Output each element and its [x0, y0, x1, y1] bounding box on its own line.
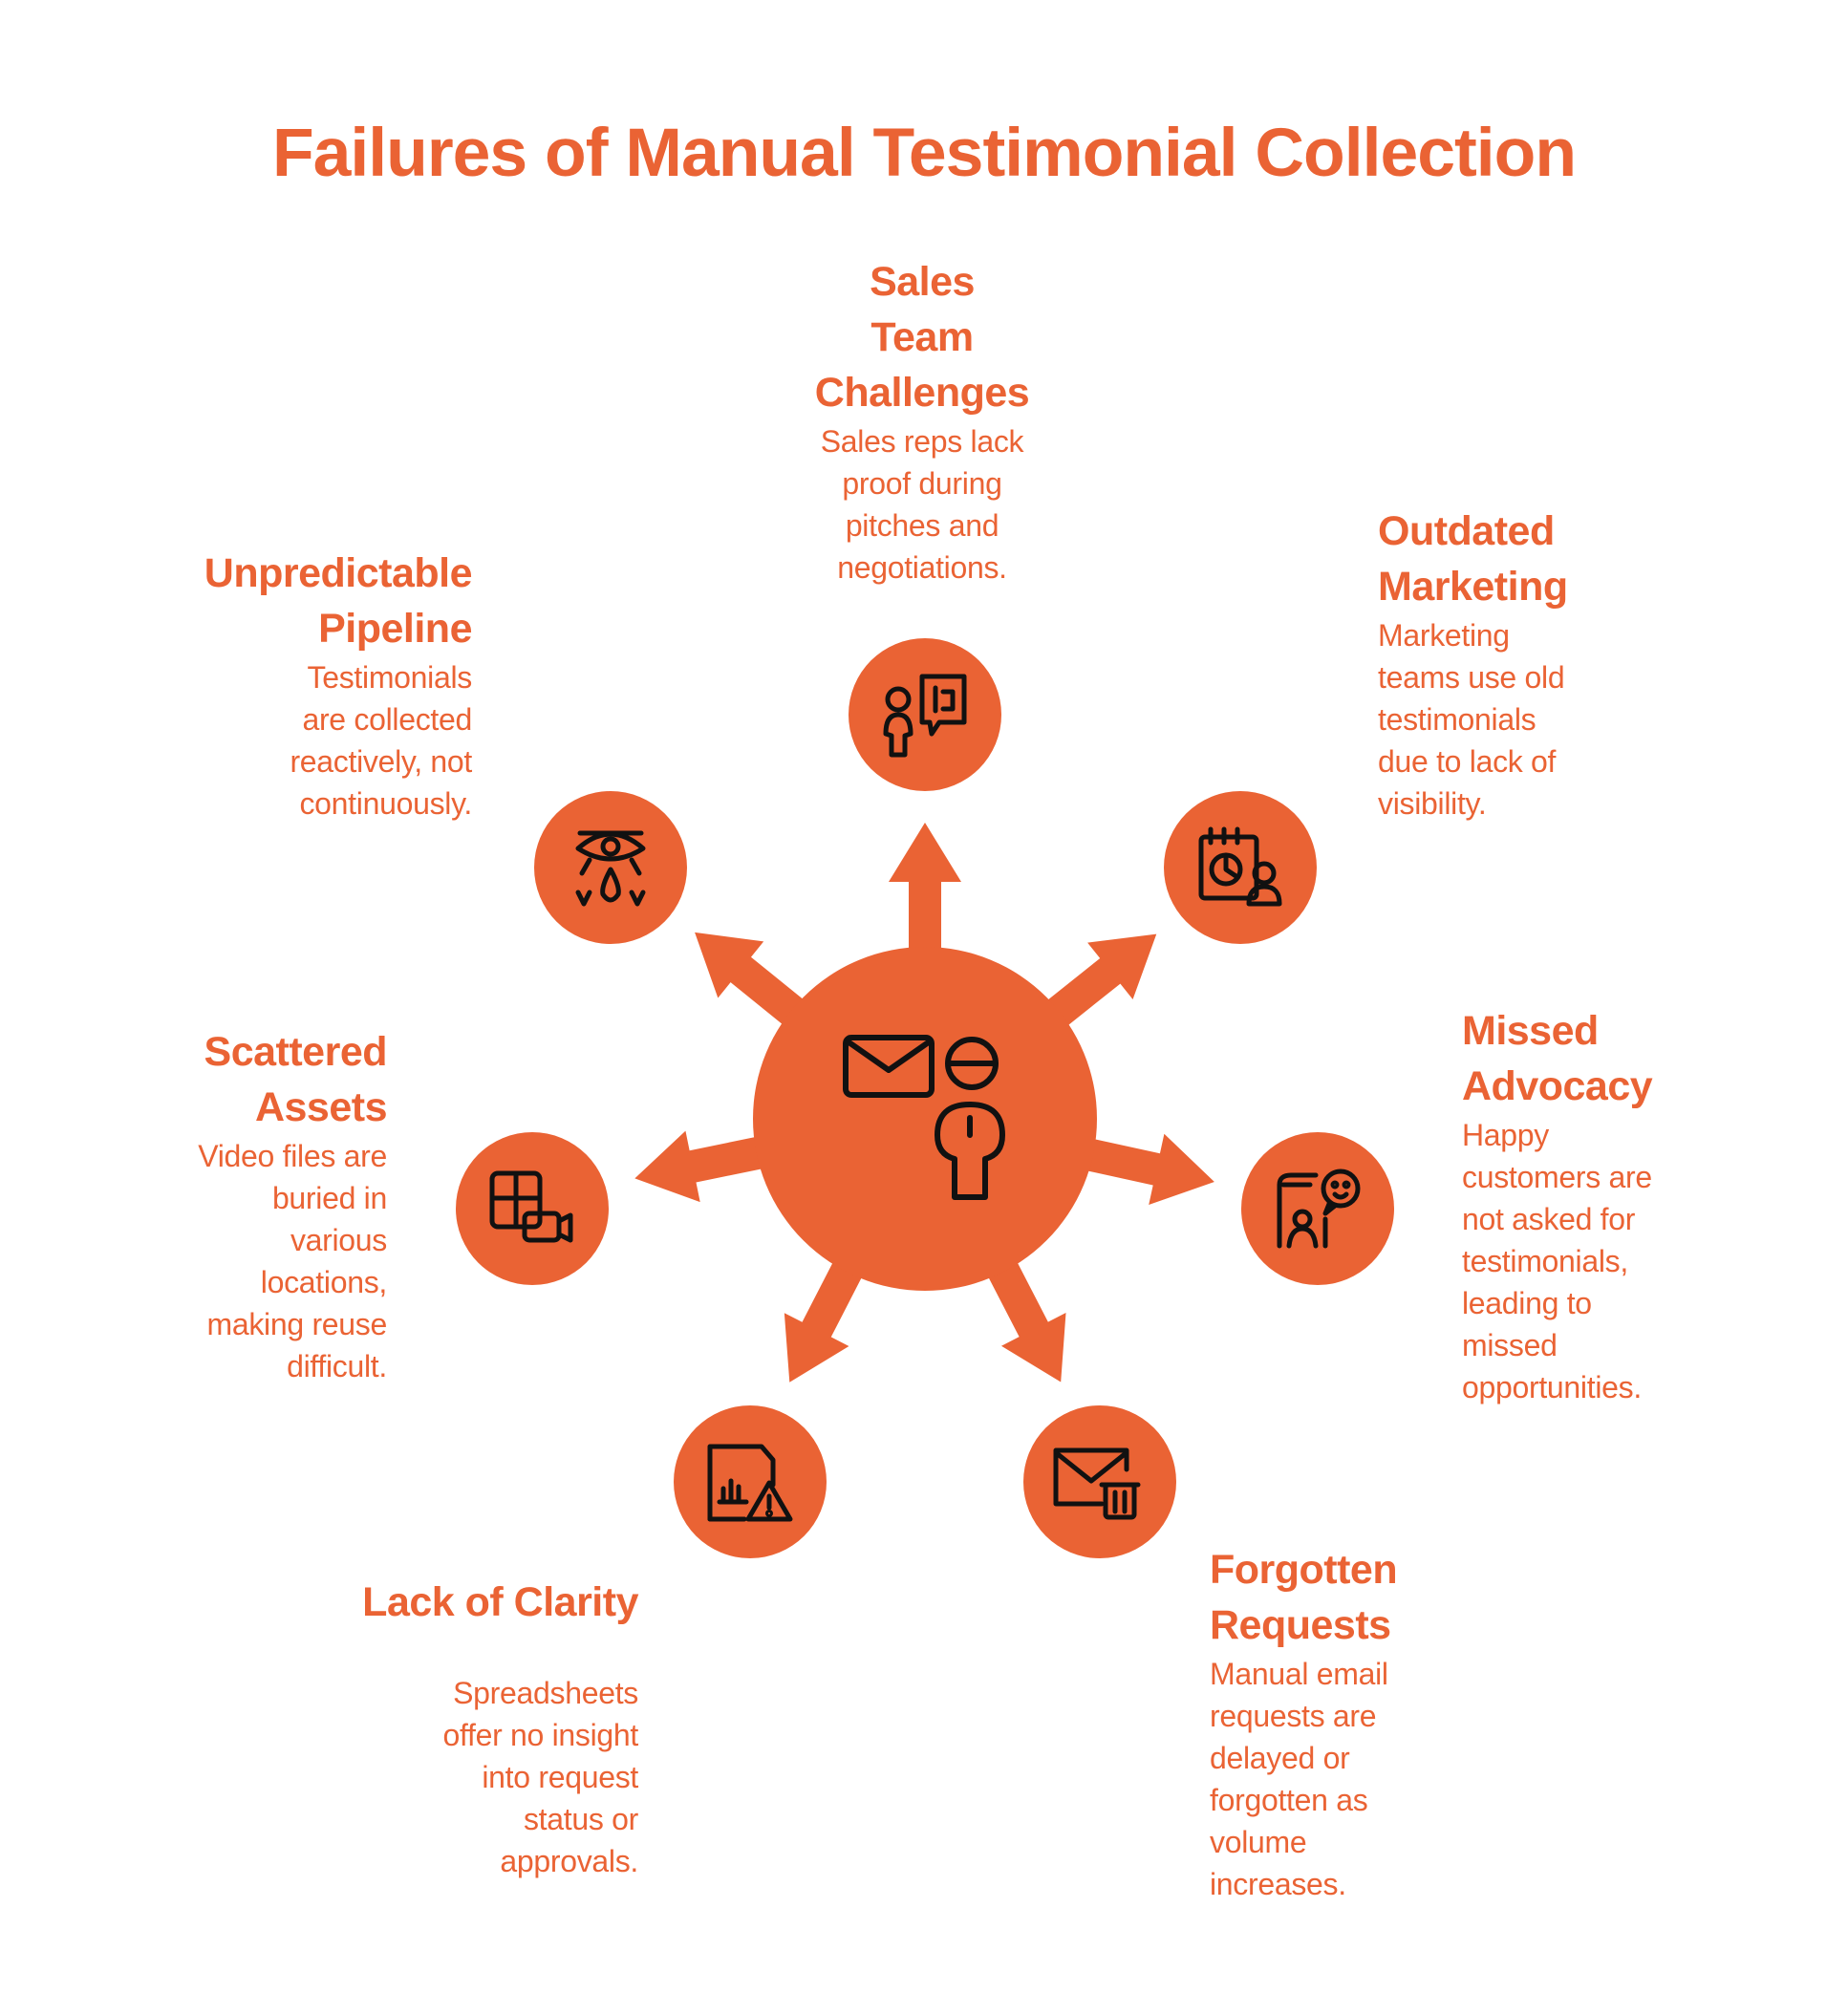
text: forgotten requests: forgotten as — [1210, 1783, 1367, 1817]
title: Failures of Manual Testimonial Collection — [272, 115, 1576, 191]
text: outdated marketing: teams use old — [1378, 660, 1564, 695]
text: scattered assets: various — [290, 1223, 387, 1257]
text: unpredictable pipeline: are collected — [302, 702, 472, 737]
icon circle: outdated marketing — [1164, 791, 1317, 944]
text: forgotten requests: Manual email — [1210, 1657, 1388, 1691]
text: forgotten requests: increases. — [1210, 1867, 1346, 1901]
text: forgotten requests: Requests — [1210, 1602, 1391, 1648]
text: missed advocacy: customers are — [1462, 1160, 1652, 1194]
text: forgotten requests: delayed or — [1210, 1741, 1349, 1775]
text: lack of clarity: Spreadsheets — [453, 1676, 638, 1710]
text: lack of clarity: offer no insight — [442, 1718, 638, 1752]
text: outdated marketing: Outdated — [1378, 508, 1555, 554]
icon circle: missed advocacy — [1241, 1132, 1394, 1285]
text: outdated marketing: Marketing — [1378, 618, 1510, 653]
icon circle: scattered assets — [456, 1132, 609, 1285]
text: scattered assets — [198, 1029, 387, 1383]
text: forgotten requests: Forgotten — [1210, 1547, 1397, 1593]
text: unpredictable pipeline: reactively, not — [290, 744, 472, 779]
text: unpredictable pipeline: Testimonials — [308, 660, 472, 695]
text: lack of clarity: status or — [524, 1802, 638, 1836]
text: missed advocacy: testimonials, — [1462, 1244, 1628, 1278]
text: missed advocacy: opportunities. — [1462, 1370, 1642, 1404]
text: scattered assets: Scattered — [204, 1029, 387, 1075]
text: unpredictable pipeline: Unpredictable — [204, 550, 472, 596]
text: sales team challenges: proof during — [842, 466, 1002, 501]
text: sales team challenges: Sales — [870, 259, 975, 305]
text: missed advocacy: missed — [1462, 1328, 1558, 1362]
icon circle: lack of clarity — [674, 1405, 827, 1558]
text: outdated marketing: testimonials — [1378, 702, 1536, 737]
text: forgotten requests: requests are — [1210, 1699, 1376, 1733]
icon circle: forgotten requests — [1023, 1405, 1176, 1558]
text: sales team challenges — [815, 259, 1029, 585]
text: sales team challenges: negotiations. — [837, 550, 1007, 585]
text: missed advocacy: Advocacy — [1462, 1063, 1652, 1109]
text: forgotten requests: volume — [1210, 1825, 1306, 1859]
center circle with icon — [753, 947, 1097, 1291]
text: scattered assets: Video files are — [198, 1139, 387, 1173]
text: sales team challenges: Sales reps lack — [821, 424, 1023, 459]
text: scattered assets: buried in — [272, 1181, 387, 1215]
text: lack of clarity: into request — [482, 1760, 638, 1794]
text: lack of clarity: Lack of Clarity — [362, 1579, 638, 1625]
text: outdated marketing: visibility. — [1378, 786, 1486, 821]
text: unpredictable pipeline: Pipeline — [318, 606, 472, 652]
text: outdated marketing: due to lack of — [1378, 744, 1556, 779]
icon circle: unpredictable pipeline — [534, 791, 687, 944]
text: sales team challenges: pitches and — [846, 508, 999, 543]
arrows — [628, 823, 1222, 1399]
text: scattered assets: difficult. — [287, 1349, 387, 1383]
text: missed advocacy: Missed — [1462, 1008, 1599, 1054]
text: unpredictable pipeline — [204, 550, 472, 821]
text: lack of clarity — [362, 1579, 638, 1878]
icon circle: sales team — [849, 638, 1001, 791]
text: missed advocacy: leading to — [1462, 1286, 1592, 1320]
text: missed advocacy: not asked for — [1462, 1202, 1635, 1236]
text: lack of clarity: approvals. — [500, 1844, 638, 1878]
text: sales team challenges: Challenges — [815, 370, 1029, 416]
text: scattered assets: making reuse — [206, 1307, 387, 1341]
text: forgotten requests — [1210, 1547, 1397, 1901]
text: sales team challenges: Team — [870, 314, 974, 360]
text: missed advocacy — [1462, 1008, 1653, 1404]
text: missed advocacy: Happy — [1462, 1118, 1549, 1152]
text: scattered assets: Assets — [255, 1084, 387, 1130]
text: unpredictable pipeline: continuously. — [299, 786, 472, 821]
text: outdated marketing: Marketing — [1378, 564, 1568, 610]
text: outdated marketing — [1378, 508, 1568, 821]
text: scattered assets: locations, — [261, 1265, 387, 1299]
